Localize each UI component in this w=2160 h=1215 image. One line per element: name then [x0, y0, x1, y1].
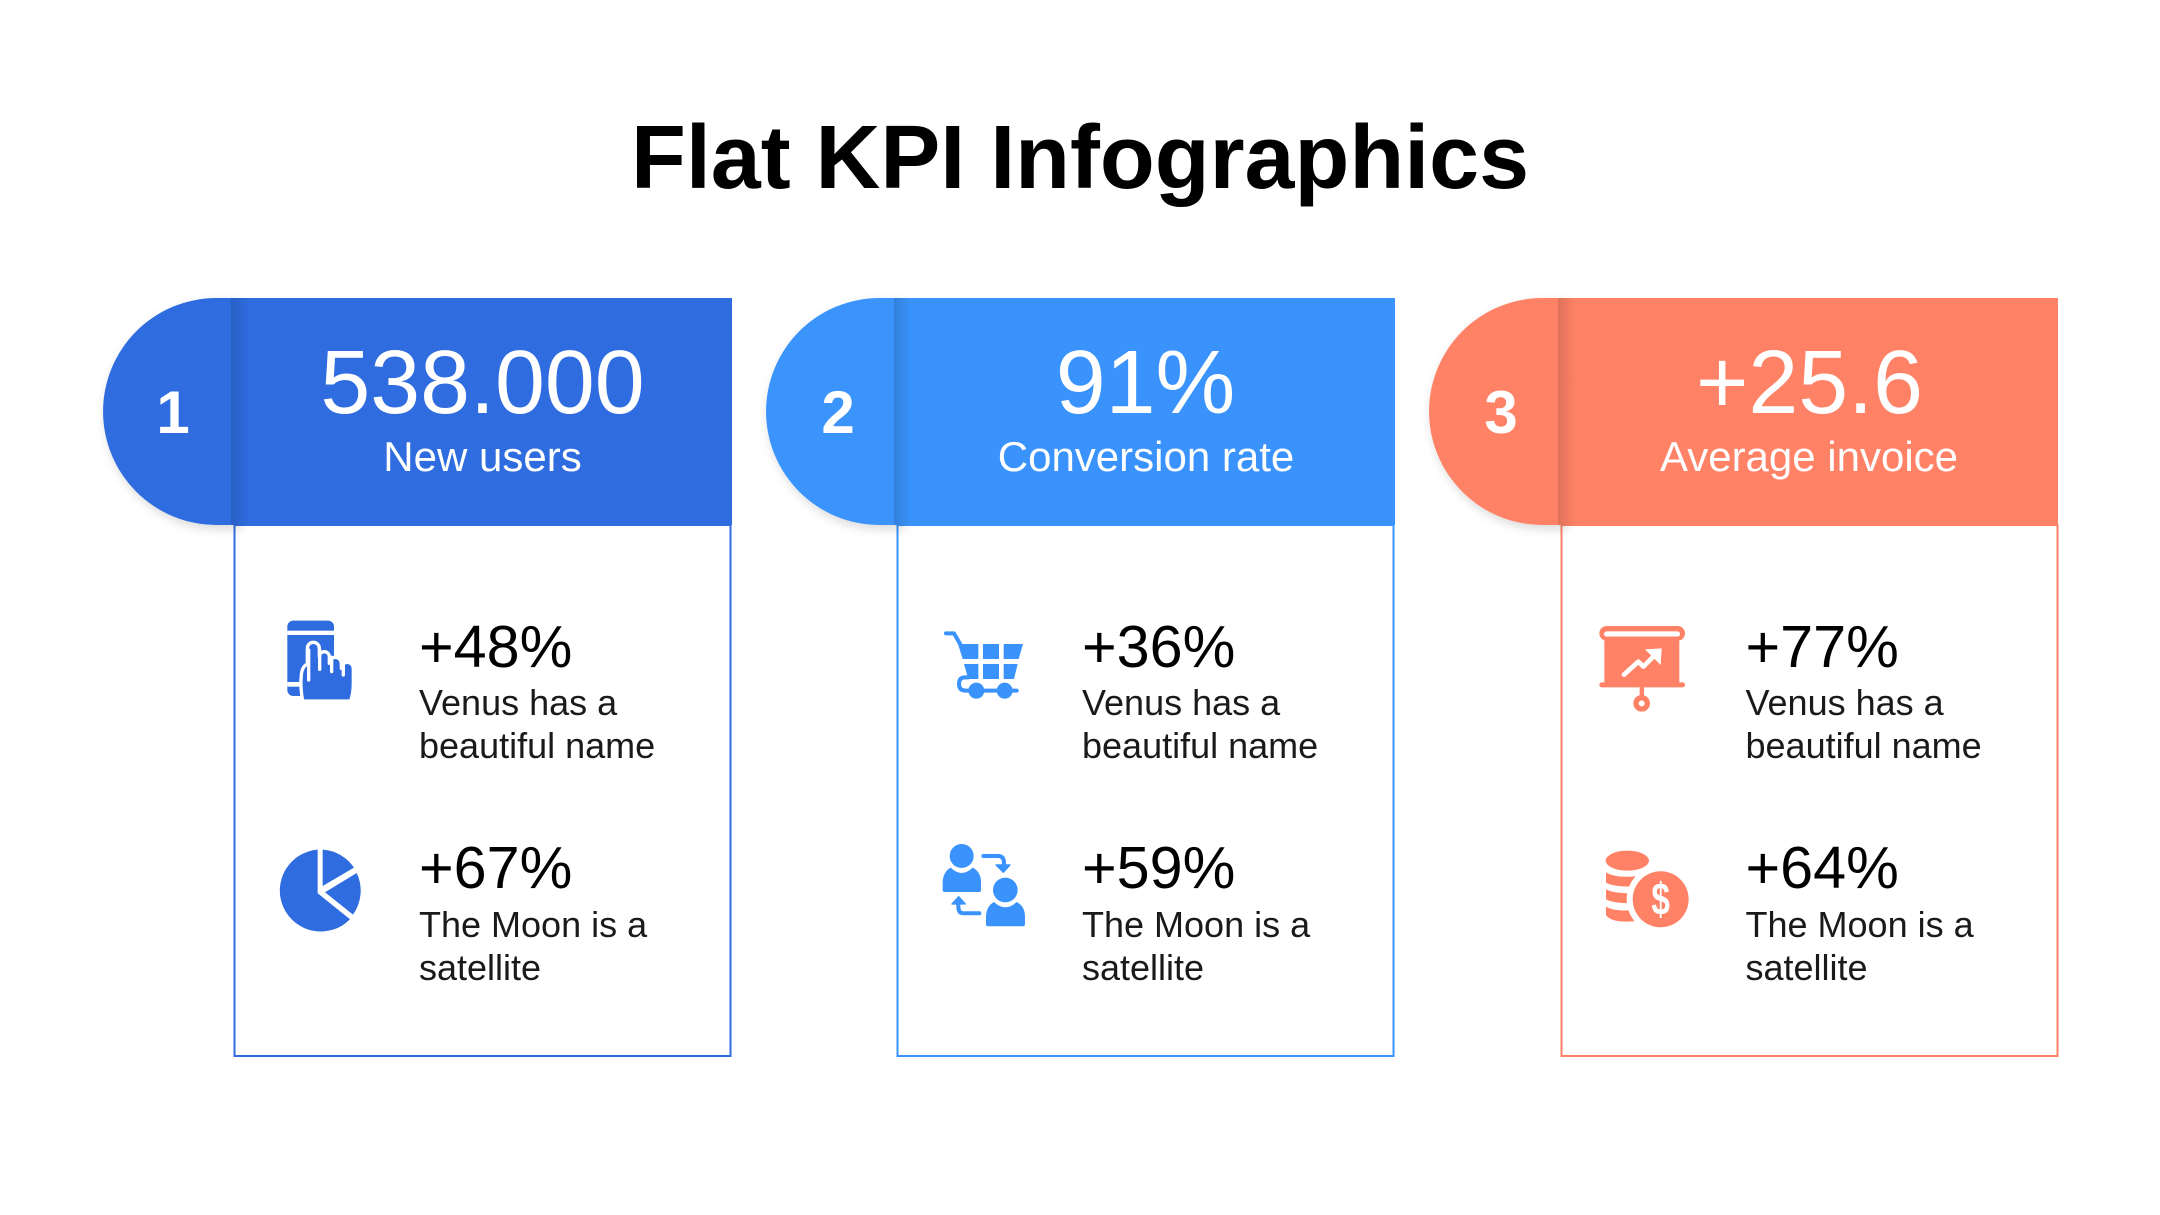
stat: +48%: +48% [419, 613, 572, 680]
stat: +59%: The Moon is a [1082, 904, 1311, 945]
number tab [1429, 298, 1566, 525]
icon: user exchange [943, 844, 1025, 926]
card outline [234, 525, 730, 1056]
header fold shadow [231, 298, 249, 525]
stat: +64%: +64% [1746, 834, 1899, 901]
stat: +64%: satellite [1746, 947, 1868, 988]
stat: +77%: +77% [1746, 613, 1899, 680]
stat: +59% [1082, 834, 1311, 988]
header band [231, 298, 732, 525]
header band [1558, 298, 2058, 525]
stat: +48%: beautiful name [419, 725, 655, 766]
stat: +36%: beautiful name [1082, 725, 1318, 766]
step number: 1 [156, 379, 190, 446]
stat: +48% [419, 613, 655, 766]
stat: +67%: The Moon is a [419, 904, 648, 945]
stat: +64%: The Moon is a [1746, 904, 1975, 945]
stat: +67%: satellite [419, 947, 541, 988]
panel: conversion rate [766, 298, 1395, 1056]
kpi value: 91% [1056, 333, 1235, 433]
kpi value: 538.000 [320, 333, 645, 433]
card outline [898, 525, 1394, 1056]
stat: +77% [1746, 613, 1982, 766]
stat: +59%: +59% [1082, 834, 1235, 901]
title: Flat KPI Infographics [631, 108, 1529, 208]
icon: presentation board [1599, 626, 1685, 709]
stat: +36%: Venus has a [1082, 682, 1281, 723]
stat: +67%: +67% [419, 834, 572, 901]
panel: new users [103, 298, 732, 1056]
stat: +59%: satellite [1082, 947, 1204, 988]
number tab [103, 298, 240, 525]
number tab [766, 298, 903, 525]
step number: 3 [1484, 379, 1518, 446]
header fold shadow [1558, 298, 1576, 525]
stat: +77%: beautiful name [1746, 725, 1982, 766]
kpi value: +25.6 [1696, 333, 1923, 433]
stat: +36%: +36% [1082, 613, 1235, 680]
step number: 2 [821, 379, 855, 446]
stat: +67% [419, 834, 648, 988]
header fold shadow [894, 298, 912, 525]
kpi label: Average invoice [1660, 433, 1958, 480]
icon: coins: $ [1651, 875, 1670, 925]
stat: +36% [1082, 613, 1318, 766]
header band [894, 298, 1395, 525]
stat: +48%: Venus has a [419, 682, 618, 723]
kpi label: New users [383, 433, 582, 480]
panel: average invoice [1429, 298, 2058, 1056]
icon: pie chart [280, 850, 361, 932]
icon: shopping cart [946, 633, 1023, 699]
icon: phone touch [287, 621, 355, 703]
icon: coins [1606, 851, 1695, 933]
kpi label: Conversion rate [998, 433, 1294, 480]
stat: +64% [1746, 834, 1975, 988]
card outline [1562, 525, 2058, 1056]
stat: +77%: Venus has a [1746, 682, 1945, 723]
